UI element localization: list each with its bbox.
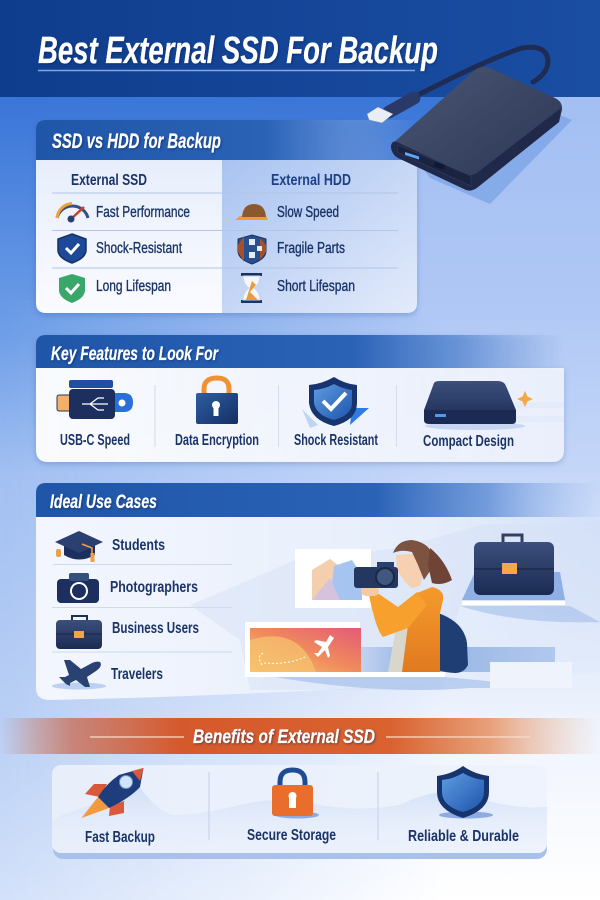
icon: hourglass: [241, 273, 262, 303]
icon: padlock: [196, 378, 238, 424]
title: Best External SSD For Backup: [38, 30, 438, 72]
column heading: SSD: External SSD: [71, 172, 147, 189]
row label: Fragile Parts: [277, 240, 345, 257]
back picture frame: [295, 549, 371, 608]
person: [361, 540, 452, 672]
icon: graduation cap: [55, 531, 103, 562]
row label: Fast Performance: [96, 204, 190, 221]
use case label: Business Users: [112, 620, 199, 637]
row label: Long Lifespan: [96, 278, 171, 295]
icon: camera: [57, 573, 99, 603]
row label: Short Lifespan: [277, 278, 355, 295]
panel: benefits: [52, 765, 547, 859]
benefits banner: [0, 718, 600, 754]
panel: key features: [36, 335, 564, 462]
row label: Shock-Resistant: [96, 240, 183, 257]
icon: snail: [235, 204, 268, 220]
icon: rocket: [82, 768, 144, 818]
icon: green shield: [59, 274, 85, 303]
right column background: [222, 160, 417, 313]
scene backdrop: [190, 522, 600, 690]
camera: [354, 562, 398, 588]
travel picture: [245, 622, 361, 677]
right block: [490, 662, 572, 688]
header band: [0, 0, 600, 97]
feature label: Compact Design: [423, 433, 514, 450]
feature label: USB-C Speed: [60, 432, 130, 449]
foreground shelf: [245, 672, 445, 677]
use case label: Photographers: [110, 579, 198, 596]
icon: blue shield: [437, 766, 493, 818]
icon: briefcase: [56, 616, 102, 649]
panel heading: Key Features to Look For: [51, 344, 219, 365]
use case label: Students: [112, 537, 165, 554]
icon: orange lock: [272, 770, 319, 818]
panel header: [36, 120, 417, 160]
icon: shield check: [58, 234, 86, 263]
benefit label: Secure Storage: [247, 827, 336, 844]
icon: broken shield: [238, 235, 266, 264]
feature label: Shock Resistant: [294, 432, 378, 449]
panel heading: SSD vs HDD for Backup: [52, 130, 221, 153]
right briefcase on shelf: [462, 535, 565, 605]
illustration: external SSD with cable: [367, 47, 572, 204]
row label: Slow Speed: [277, 204, 339, 221]
backpack: [427, 613, 468, 673]
illustration: photographer scene: [190, 522, 600, 690]
panel shadow: [53, 772, 547, 859]
panel body: [36, 368, 564, 462]
decorative light wave: [417, 97, 600, 320]
icon: airplane: [52, 660, 106, 690]
banner heading: Benefits of External SSD: [193, 726, 375, 748]
icon: gauge: [57, 204, 88, 222]
left column background: [36, 160, 222, 313]
use case label: Travelers: [111, 666, 163, 683]
icon: compact drive: [424, 381, 564, 430]
icon: USB-C drive: [57, 380, 133, 419]
panel body: [52, 765, 547, 853]
panel header: [36, 335, 564, 368]
column heading: HDD: External HDD: [271, 172, 351, 189]
benefit label: Fast Backup: [85, 829, 155, 846]
icon: shield with check: [302, 377, 369, 428]
panel heading: Ideal Use Cases: [50, 492, 157, 513]
panel header: [36, 483, 600, 517]
panel body: [36, 517, 600, 700]
panel: ideal use cases: [36, 483, 600, 700]
feature label: Data Encryption: [175, 432, 259, 449]
benefit label: Reliable & Durable: [408, 828, 519, 845]
panel: SSD vs HDD: [36, 120, 417, 313]
